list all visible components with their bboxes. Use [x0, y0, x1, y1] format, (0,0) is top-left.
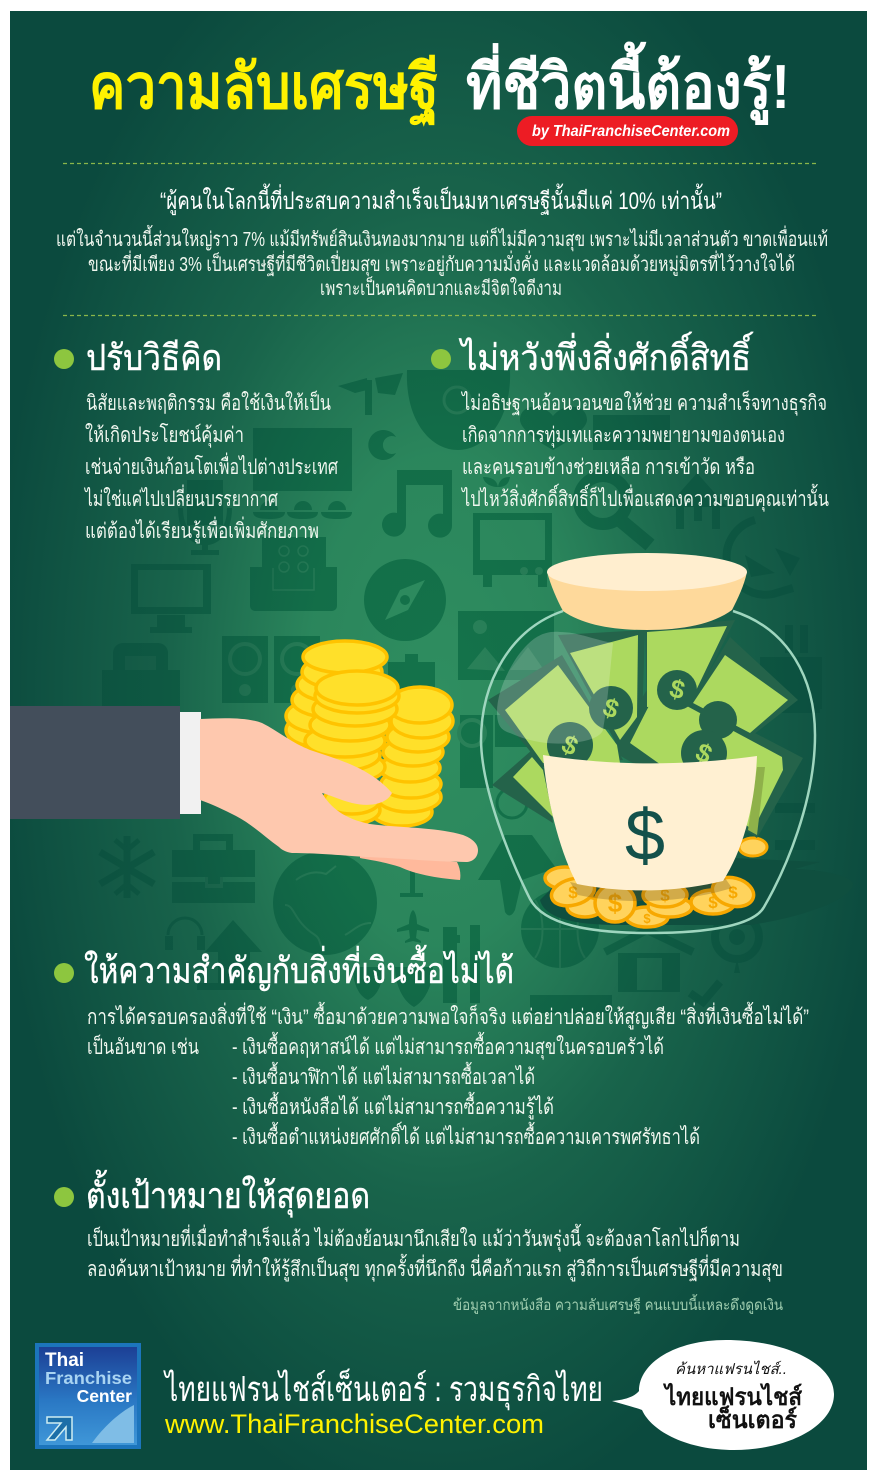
jar coins: $: [660, 886, 670, 905]
body text: [87, 1224, 783, 1282]
body text: แต่ต้องได้เรียนรู้เพื่อเพิ่มศักยภาพ: [85, 516, 319, 544]
quote: “ผู้คนในโลกนี้ที่ประสบความสำเร็จเป็นมหาเศรษฐีนั้นมีแค่ 10% เท่านั้น”: [160, 183, 722, 216]
dollar sign: $: [625, 796, 665, 876]
speech bubble: ค้นหาแฟรนไชส์..: [675, 1360, 787, 1378]
panel: set the ultimate goal: [54, 1169, 783, 1282]
footer heading: ไทยแฟรนไชส์เซ็นเตอร์ : รวมธุรกิจไทย: [163, 1368, 603, 1410]
body text: - เงินซื้อหนังสือได้ แต่ไม่สามารถซื้อความรู้ได้: [232, 1092, 554, 1120]
banknotes: $: [557, 728, 583, 762]
bullet: [431, 349, 451, 369]
hand: [200, 718, 478, 862]
byline badge: by ThaiFranchiseCenter.com: [532, 123, 730, 140]
coin behind: [739, 838, 767, 856]
heading: ตั้งเป้าหมายให้สุดยอด: [86, 1169, 370, 1218]
background icon pattern: [100, 370, 822, 1013]
jar label shadow: [570, 878, 732, 901]
body text: [87, 1002, 809, 1149]
body text: - เงินซื้อคฤหาสน์ได้ แต่ไม่สามารถซื้อความสุขในครอบครัวได้: [232, 1032, 664, 1060]
illustration: money jar: [481, 553, 853, 933]
jar shadow: [540, 858, 853, 925]
logo: Thai Franchise Center: Franchise: [45, 1368, 132, 1388]
bullet: [54, 349, 74, 369]
body text: เป็นอันขาด เช่น: [87, 1033, 199, 1059]
heading: ปรับวิธีคิด: [86, 337, 222, 378]
jar lid: [547, 553, 747, 630]
speech bubble: ไทยแฟรนไชส์: [662, 1382, 802, 1411]
illustration: hand holding coins: [10, 641, 478, 880]
title: [89, 41, 790, 127]
body text: นิสัยและพฤติกรรม คือใช้เงินให้เป็น: [86, 389, 331, 415]
panel: what money cannot buy: [54, 944, 809, 1149]
body text: - เงินซื้อตำแหน่งยศศักดิ์ได้ แต่ไม่สามารถซื้อความเคารพศรัทธาได้: [232, 1121, 700, 1149]
heading: ให้ความสำคัญกับสิ่งที่เงินซื้อไม่ได้: [84, 944, 514, 991]
shirt cuff: [180, 712, 201, 814]
hand lower finger: [360, 855, 460, 880]
logo: Thai Franchise Center: Center: [77, 1386, 132, 1406]
jar coins: $: [728, 883, 738, 902]
title: ที่ชีวิตนี้ต้องรู้!: [466, 41, 790, 125]
heading: ไม่หวังพึ่งสิ่งศักดิ์สิทธิ์: [458, 331, 754, 378]
jar coins: [545, 867, 757, 927]
body text: เช่นจ่ายเงินก้อนโตเพื่อไปต่างประเทศ: [85, 452, 339, 479]
jar coins: $: [708, 893, 718, 912]
jar outline: [481, 611, 815, 933]
panel: change your thinking: [54, 337, 339, 544]
logo: Thai Franchise Center: [35, 1343, 141, 1449]
body text: [460, 389, 829, 512]
panel: do not rely on the sacred: [431, 331, 829, 512]
speech bubble: [612, 1340, 834, 1450]
footer website: www.ThaiFranchiseCenter.com: [164, 1409, 544, 1439]
logo: Thai Franchise Center: Thai: [45, 1350, 84, 1371]
banknotes: $: [599, 691, 623, 725]
body text: เกิดจากการทุ่มเทและความพยายามของตนเอง: [462, 424, 785, 448]
banknotes: $: [691, 736, 717, 770]
bullet: [54, 963, 74, 983]
byline badge: [517, 116, 738, 146]
jar label: [543, 755, 757, 890]
speech bubble: เซ็นเตอร์: [708, 1405, 797, 1434]
suit sleeve: [10, 706, 180, 819]
bullet: [54, 1187, 74, 1207]
body text: [84, 389, 339, 544]
jar coins: $: [568, 883, 578, 902]
coin stacks: [286, 641, 453, 826]
jar coins: $: [608, 888, 623, 918]
body text: - เงินซื้อนาฬิกาได้ แต่ไม่สามารถซื้อเวลาได้: [232, 1062, 535, 1089]
body text: ไม่ใช่แค่ไปเปลี่ยนบรรยากาศ: [84, 484, 278, 511]
intro text block: เพราะเป็นคนคิดบวกและมีจิตใจดีงาม: [320, 275, 562, 300]
logo arrow: [47, 1417, 72, 1440]
jar highlight: [497, 632, 613, 744]
banknotes: $: [666, 673, 689, 706]
intro text block: [56, 183, 828, 300]
jar coins: $: [643, 911, 651, 926]
body text: ให้เกิดประโยชน์คุ้มค่า: [85, 423, 244, 448]
title: ความลับเศรษฐี: [89, 53, 439, 127]
source note: ข้อมูลจากหนังสือ ความลับเศรษฐี คนแบบนี้แหละดึงดูดเงิน: [453, 1294, 783, 1314]
body text: และคนรอบข้างช่วยเหลือ การเข้าวัด หรือ: [462, 456, 755, 479]
banknotes: [488, 620, 803, 838]
